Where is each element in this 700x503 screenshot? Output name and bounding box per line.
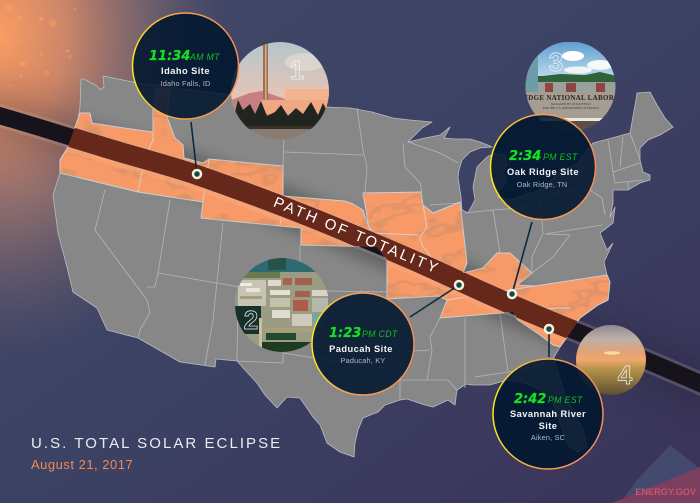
callout: Oak Ridge site: Oak Ridge, TN xyxy=(517,180,567,189)
callout: Paducah site: Paducah, KY xyxy=(341,356,385,365)
photo 3: Oak Ridge site: FOR THE U.S. DEPARTMENT OF ENERGY xyxy=(543,106,600,110)
black strip outside land xyxy=(0,110,700,392)
callout: Savannah River site: 2:42 xyxy=(514,392,546,407)
callout: Oak Ridge site xyxy=(490,114,596,220)
shadow across land xyxy=(92,118,560,352)
title: U.S. TOTAL SOLAR ECLIPSE xyxy=(31,435,282,452)
callout: Idaho site: AM MT xyxy=(189,52,220,62)
map of the contiguous United States xyxy=(52,76,674,458)
state borders xyxy=(95,107,643,400)
callout leader lines xyxy=(191,122,549,357)
number 4: 4 xyxy=(618,360,633,390)
number 2: 2 xyxy=(244,305,258,335)
callout: Paducah site xyxy=(312,293,414,395)
callout: Idaho site xyxy=(132,13,238,119)
photo 3: Oak Ridge site: MANAGED BY UT-BATTELLE xyxy=(551,102,591,106)
site markers xyxy=(193,170,553,333)
date: August 21, 2017 xyxy=(31,457,133,472)
callout: Savannah River site: Site xyxy=(539,421,557,431)
energy.gov corner logo: ENERGY.GOV xyxy=(635,487,697,497)
photo 3: Oak Ridge site: OAK RIDGE NATIONAL LABORATORY xyxy=(501,94,640,102)
outer pale edges xyxy=(0,110,700,392)
callout: Oak Ridge site: PM EST xyxy=(543,152,578,162)
callout: Paducah site: Paducah Site xyxy=(329,344,393,354)
callout: Savannah River site xyxy=(493,359,603,469)
photo 2: Paducah site xyxy=(235,258,328,352)
callout: Idaho site: Idaho Site xyxy=(161,66,210,76)
orange state divisions xyxy=(138,132,570,312)
callout: Savannah River site: PM EST xyxy=(548,395,583,405)
brown strip within states xyxy=(66,128,578,342)
wide shadow of the eclipse path over sky xyxy=(0,110,700,392)
photo 1: Idaho site xyxy=(231,42,329,140)
callout: Oak Ridge site: 2:34 xyxy=(509,149,541,164)
bokeh light specks xyxy=(4,4,76,88)
callout: Idaho site: 11:34 xyxy=(149,49,190,64)
callout: Oak Ridge site: Oak Ridge Site xyxy=(507,167,579,177)
terrain texture xyxy=(60,109,610,330)
orange states in path xyxy=(60,88,610,347)
number 1: 1 xyxy=(290,55,304,85)
path label: PATH OF TOTALITY xyxy=(271,194,442,278)
photo 4: Savannah River site xyxy=(576,325,646,395)
energy.gov corner logo xyxy=(612,445,700,503)
callout: Paducah site: 1:23 xyxy=(329,326,361,341)
callout: Savannah River site: Savannah River xyxy=(510,409,586,419)
callout: Savannah River site: Aiken, SC xyxy=(531,433,565,442)
land mass xyxy=(53,76,673,457)
callout: Paducah site: PM CDT xyxy=(362,329,398,339)
photo 3: Oak Ridge site xyxy=(526,42,616,130)
number 3: 3 xyxy=(549,47,563,77)
callout: Idaho site: Idaho Falls, ID xyxy=(160,79,211,88)
